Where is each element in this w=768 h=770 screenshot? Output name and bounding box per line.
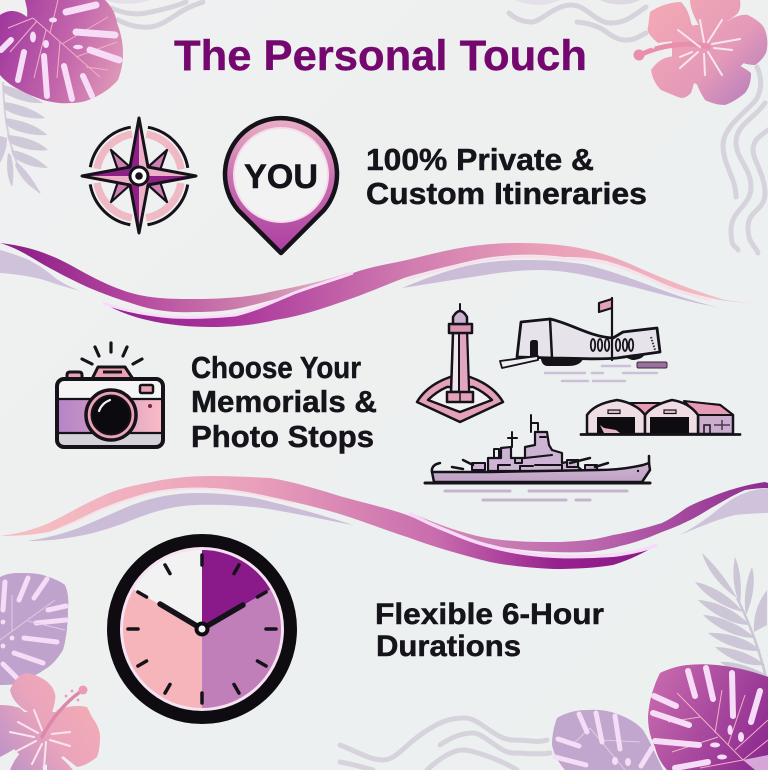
fern leaf: top left bbox=[0, 82, 48, 193]
decorative waves: top left bbox=[105, 0, 203, 27]
icon: lighthouse bbox=[417, 304, 503, 422]
icon: camera bbox=[57, 343, 163, 447]
monstera leaf: top left bbox=[0, 0, 123, 103]
text: flexible durations bbox=[375, 598, 604, 663]
text: flexible durations: Durations bbox=[376, 630, 521, 663]
icon: arizona memorial bbox=[500, 298, 667, 381]
text: private itineraries: 100% Private & bbox=[366, 142, 594, 177]
monstera leaf: bottom right bbox=[648, 664, 768, 770]
clock ticks bbox=[128, 555, 276, 703]
clock hands bbox=[160, 604, 243, 629]
text: flexible durations: Flexible 6-Hour bbox=[375, 598, 604, 631]
fern leaf: bottom right bbox=[695, 553, 768, 682]
icon: clock bbox=[114, 540, 290, 718]
decorative waves: right edge bbox=[723, 67, 768, 253]
decorative waves: bottom bbox=[340, 718, 550, 770]
text: private itineraries: Custom Itineraries bbox=[366, 176, 647, 211]
clock wedges bbox=[123, 550, 281, 708]
text: memorials and photo stops: Choose Your bbox=[191, 350, 361, 385]
pin label: YOU bbox=[244, 158, 318, 196]
hibiscus flower: top right bbox=[634, 0, 767, 105]
monstera leaf: lower left bbox=[0, 573, 68, 685]
decorative waves: top right bbox=[509, 0, 646, 40]
text: memorials and photo stops bbox=[191, 350, 377, 454]
text: memorials and photo stops: Memorials & bbox=[191, 384, 377, 419]
icon: compass bbox=[82, 118, 196, 233]
icon: battleship bbox=[425, 415, 650, 500]
icon: hangars bbox=[581, 400, 740, 434]
text: private itineraries bbox=[366, 142, 647, 211]
icon: map pin with YOU bbox=[225, 118, 337, 253]
wave divider: upper bbox=[0, 243, 760, 327]
wave divider: lower bbox=[0, 476, 768, 569]
title: The Personal Touch bbox=[174, 32, 587, 80]
text: memorials and photo stops: Photo Stops bbox=[191, 419, 374, 454]
memorial flag bbox=[599, 298, 612, 360]
hibiscus flower: bottom left bbox=[0, 673, 100, 770]
water reflections bbox=[445, 491, 627, 500]
camera flash rays bbox=[82, 343, 142, 364]
monstera leaf: bottom lavender bbox=[552, 710, 663, 770]
